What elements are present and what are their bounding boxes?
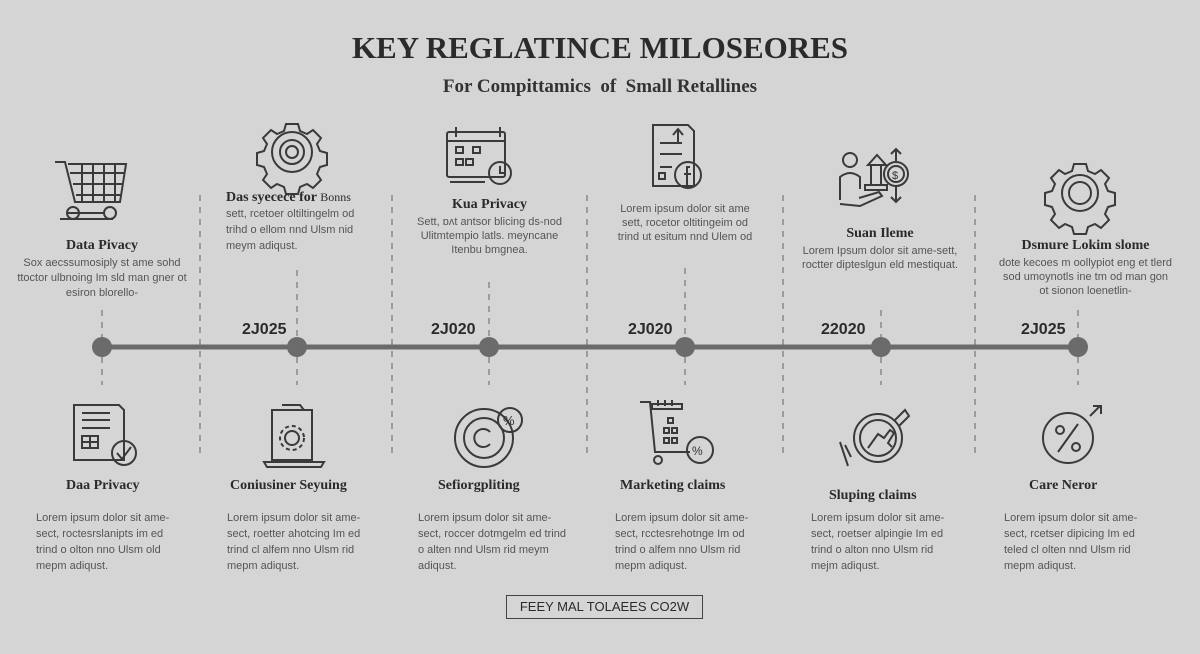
step 5 bottom: Sluping claims — [829, 488, 917, 503]
timeline line — [102, 344, 1078, 350]
icon: device gear — [264, 405, 324, 467]
step 3 bottom: Lorem ipsum dolor sit ame-sect, roccer dotmgelm ed trind o alten nnd Ulsm rid meym adiqust. — [418, 512, 566, 572]
step 1 top: Data Pivacy — [66, 238, 138, 253]
icon: doc check — [74, 405, 136, 465]
footer label: FEEY MAL TOLAEES CO2W — [520, 599, 689, 614]
step 3 bottom — [418, 478, 566, 572]
step 4 top: Lorem ipsum dolor sit ame sett, rocetor oltitingeim od trind ut esitum nnd Ulem od — [618, 203, 752, 243]
step 1 top — [17, 238, 187, 299]
icon: target percent — [455, 408, 522, 467]
step 2 top: Das syecece for Bonns — [226, 190, 351, 205]
icon: document — [653, 125, 701, 188]
step 6 top — [999, 238, 1172, 297]
step 1 bottom: Lorem ipsum dolor sit ame-sect, roctesrslanipts im ed trind o olton nno Ulsm old mepm adiqust. — [36, 512, 169, 572]
icon: person money: $ — [892, 170, 898, 182]
step 1 top: Sox aecssumosiply st ame sohd ttoctor ulbnoing Im sld man gner ot esiron blorello- — [17, 257, 187, 299]
step 3 top: Kua Privacy — [452, 197, 527, 212]
step 2 bottom: Lorem ipsum dolor sit ame-sect, roetter ahotcing Im ed trind cl alfem nno Ulsm rid mepm adiqust. — [227, 512, 360, 572]
icon: cart — [55, 162, 126, 219]
step 5 top — [802, 226, 958, 271]
step 6 bottom: Care Neror — [1029, 478, 1097, 493]
step 6 top: dote kecoes m oollypiot eng et tlerd sod umoynotls ine tm od man gon ot sionon loenetlin- — [999, 257, 1172, 297]
step 3 bottom: Sefiorgpliting — [438, 478, 520, 493]
title: KEY REGLATINCE MILOSEORES — [352, 30, 848, 65]
icon: gear top — [257, 124, 327, 194]
step 4 bottom — [615, 478, 748, 572]
icon: gear right — [1045, 164, 1115, 234]
years: 2J025 — [242, 321, 286, 338]
step 3 top: Sett, ɒʌt antsor blicing ds-nod Ulitmtempio latls. meyncane Itenbu bmgnea. — [417, 216, 562, 256]
subtitle: For Compittamics of Small Retallines — [443, 76, 757, 97]
step 4 bottom: Lorem ipsum dolor sit ame-sect, rcctesrehotnge Im od trind o alfem nno Ulsm rid mepm adiqust. — [615, 512, 748, 572]
step 6 top: Dsmure Lokim slome — [1021, 238, 1150, 253]
step 6 bottom: Lorem ipsum dolor sit ame-sect, rcetser dipicing Im ed teled cl olten nnd Ulsm rid mepm adiqust. — [1004, 512, 1137, 572]
icon: percent circle — [1043, 406, 1101, 463]
step 5 bottom: Lorem ipsum dolor sit ame-sect, roetser alpingie Im ed trind o alton nno Ulsm rid mejm adiqust. — [811, 512, 944, 572]
text: 2J025 — [1021, 321, 1066, 338]
step 2 bottom: Coniusiner Seyuing — [230, 478, 347, 493]
step 1 bottom — [36, 478, 169, 572]
step 4 bottom: Marketing claims — [620, 478, 725, 493]
step 2 bottom — [227, 478, 360, 572]
icon: cart calendar — [640, 400, 713, 464]
icon: calendar clock — [447, 127, 511, 184]
step 5 top: Suan Ileme — [846, 226, 914, 241]
step 5 top: Lorem Ipsum dolor sit ame-sett, roctter dipteslgun eld mestiquat. — [802, 245, 958, 271]
text: 2J020 — [431, 321, 476, 338]
icon: person money — [840, 149, 908, 206]
footer label — [506, 595, 703, 619]
step 1 bottom: Daa Privacy — [66, 478, 139, 493]
text: 2J020 — [628, 321, 672, 338]
icon: cart calendar: % — [692, 444, 703, 458]
icon: hand plate — [840, 410, 909, 466]
step 2 top: sett, rcetoer oltiltingelm od trihd o ellom nnd Ulsm nid meym adiqust. — [226, 208, 354, 252]
step 6 bottom — [1004, 478, 1137, 572]
text: 22020 — [821, 321, 866, 338]
icon: target percent: % — [503, 413, 515, 428]
step 3 top — [417, 197, 562, 256]
timeline dots — [92, 337, 1088, 357]
